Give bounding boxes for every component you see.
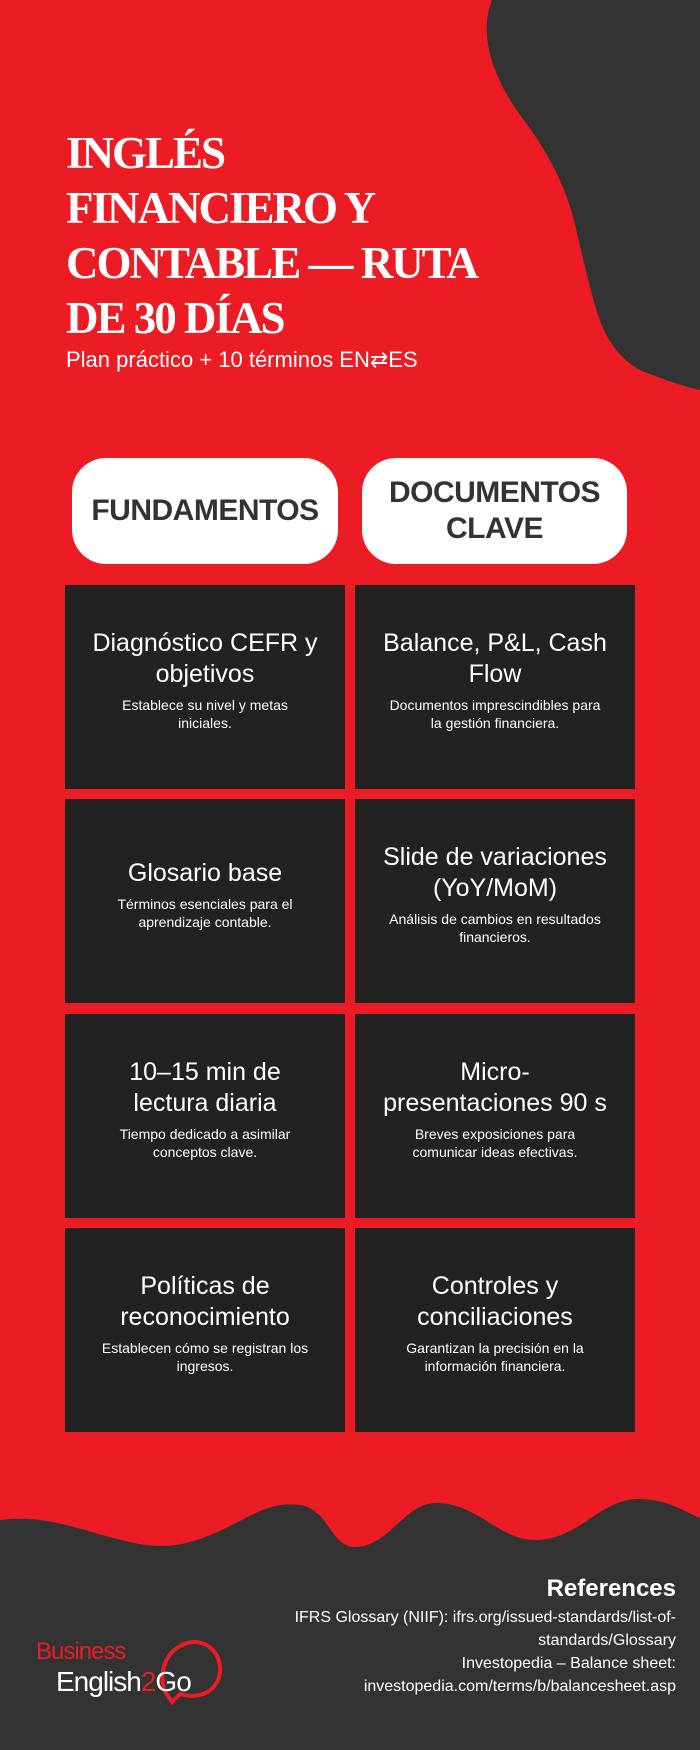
card 7 [65, 1228, 345, 1432]
card 7: Políticas de reconocimiento [120, 1272, 290, 1331]
card 6: Micro- [460, 1058, 530, 1086]
card 3: Glosario base [128, 858, 282, 886]
card 4 [355, 799, 635, 1003]
pill: documentos clave [362, 458, 627, 564]
logo [36, 1638, 222, 1706]
pill: documentos clave: DOCUMENTOS [389, 476, 600, 509]
card 8 [355, 1228, 635, 1432]
card 5: Tiempo dedicado a asimilar conceptos clave. [120, 1126, 290, 1160]
references: IFRS Glossary (NIIF): ifrs.org/issued-standards/list-of-standards/Glossary [295, 1609, 676, 1649]
card 5: 10–15 min de [129, 1058, 281, 1086]
card 5: lectura diaria [133, 1089, 277, 1117]
card 2: Documentos imprescindibles para la gestión financiera. [390, 697, 600, 731]
card 8: Garantizan la precisión en la información financiera. [406, 1340, 584, 1374]
references [295, 1575, 676, 1695]
logo: English2Go [56, 1666, 191, 1697]
card 6: Breves exposiciones para comunicar ideas efectivas. [413, 1126, 577, 1160]
card 2 [355, 585, 635, 789]
title [66, 128, 479, 343]
card 1: Establece su nivel y metas iniciales. [122, 697, 288, 731]
logo: Business [36, 1638, 125, 1665]
card 1 [65, 585, 345, 789]
pill: documentos clave: CLAVE [446, 512, 543, 545]
card 7: Establecen cómo se registran los ingresos. [102, 1340, 308, 1374]
title: INGLÉS [66, 128, 224, 178]
card 4: Slide de variaciones (YoY/MoM) [383, 843, 607, 902]
title: CONTABLE — RUTA [66, 238, 477, 288]
card 5 [65, 1014, 345, 1218]
card 6: presentaciones 90 s [383, 1089, 607, 1117]
pill: fundamentos [72, 458, 338, 564]
pill: fundamentos: FUNDAMENTOS [91, 494, 319, 527]
subtitle: Plan práctico + 10 términos EN⇄ES [66, 347, 418, 372]
title: FINANCIERO Y [66, 183, 374, 233]
card 3: Términos esenciales para el aprendizaje contable. [117, 896, 293, 930]
card 4: Análisis de cambios en resultados financieros. [389, 911, 601, 945]
title: DE 30 DÍAS [66, 293, 284, 343]
card 3 [65, 799, 345, 1003]
card 1: Diagnóstico CEFR y objetivos [92, 629, 318, 688]
references: References [547, 1575, 676, 1602]
card 6 [355, 1014, 635, 1218]
card 2: Balance, P&L, Cash Flow [383, 629, 607, 688]
references: Investopedia – Balance sheet: investopedia.com/terms/b/balancesheet.asp [364, 1655, 676, 1695]
card 8: Controles y conciliaciones [417, 1272, 573, 1331]
